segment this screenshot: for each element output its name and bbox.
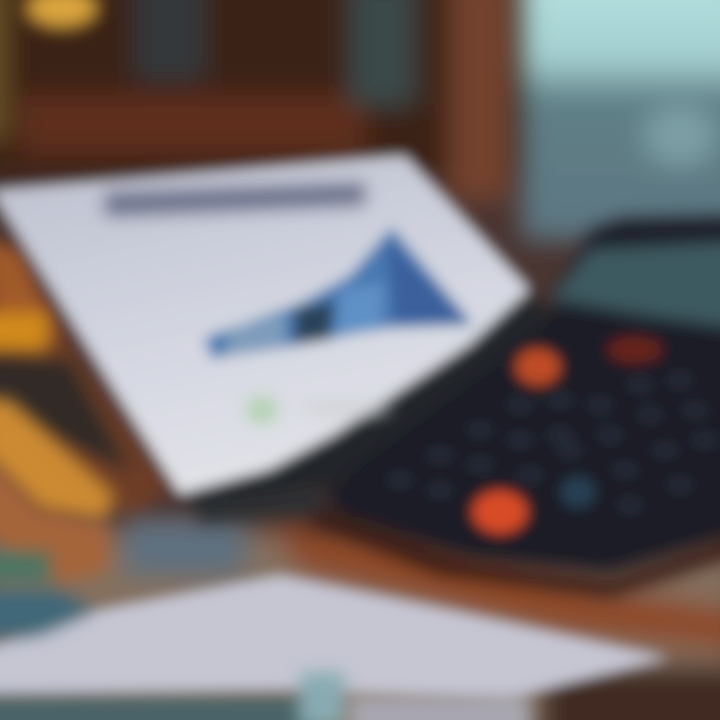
desk surface: [0, 525, 720, 720]
foreground: lower left teal strip: [0, 672, 345, 720]
key: orange upper: [515, 348, 561, 386]
lamp glow: [26, 0, 98, 28]
calculator screen: [550, 240, 720, 330]
heading on sheet, blurred out: [105, 183, 365, 216]
key: blue: [560, 476, 596, 508]
panel: white report sheet: [0, 155, 530, 495]
calculator keys: [386, 373, 719, 512]
pen shadow below sheet: [195, 490, 330, 525]
key: orange lower: [472, 490, 528, 534]
left stack: books and folders: [0, 225, 245, 585]
faint lower caption on sheet: [300, 401, 390, 415]
calculator body: [310, 215, 720, 598]
background: wooden cabinet: [0, 0, 540, 200]
foreground: white paper: [0, 575, 670, 698]
background: window, teal light: [522, 0, 720, 240]
foreground: teal corner object: [0, 590, 95, 640]
window highlight: [642, 103, 718, 167]
key: red upper: [607, 336, 663, 364]
green mark on sheet: [247, 397, 277, 423]
desk shadow behind sheet edge: [180, 290, 560, 510]
foreground: lower right paper edge: [350, 697, 530, 720]
chart: blue rising triangle: [205, 228, 472, 358]
